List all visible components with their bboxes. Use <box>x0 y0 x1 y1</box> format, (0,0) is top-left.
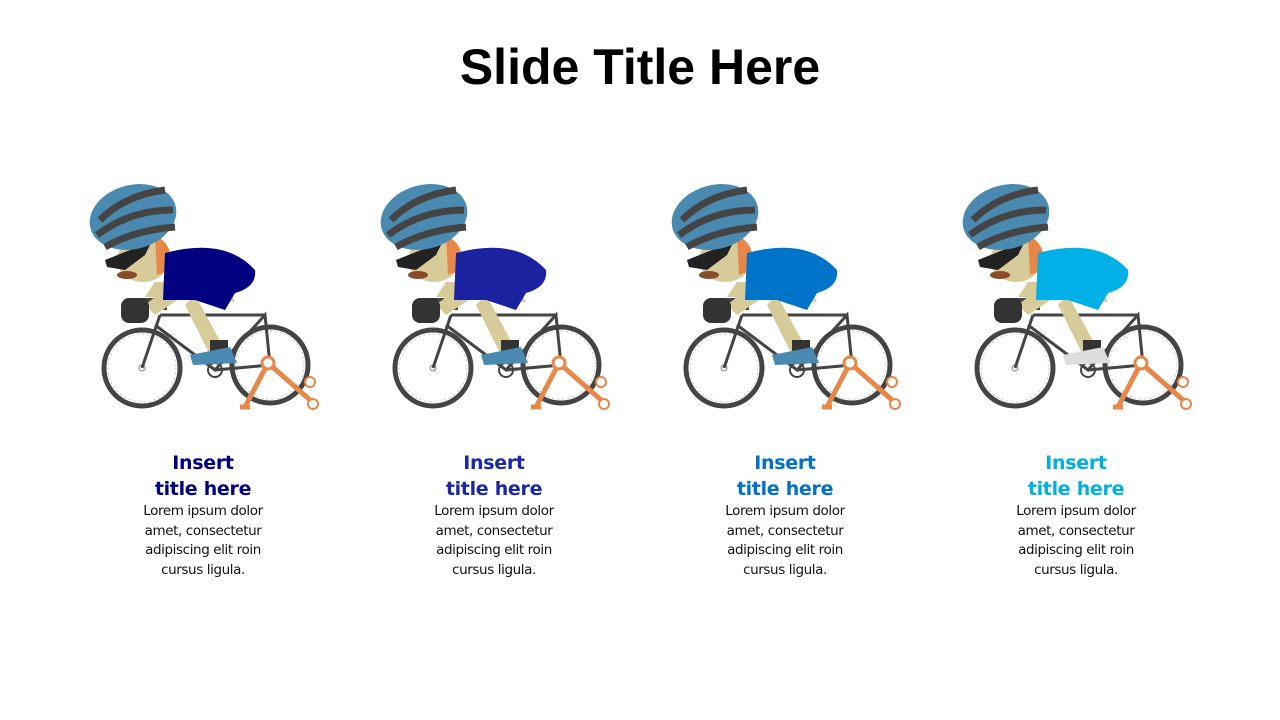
text block 1 <box>143 452 264 578</box>
cyclist 1 <box>82 175 318 409</box>
text block 2: cursus ligula. <box>452 562 536 578</box>
text block 1: Insert <box>172 452 234 474</box>
text block 3: amet, consectetur <box>727 522 843 538</box>
text block 3 <box>725 452 846 578</box>
text block 4: title here <box>1028 478 1124 500</box>
text block 1: Lorem ipsum dolor <box>143 503 263 519</box>
text block 2: adipiscing elit roin <box>436 542 552 558</box>
text block 1: amet, consectetur <box>145 522 261 538</box>
title: Slide Title Here <box>460 39 820 95</box>
text block 3: Insert <box>754 452 816 474</box>
text block 3: adipiscing elit roin <box>727 542 843 558</box>
cyclist 4 <box>955 175 1191 409</box>
text block 1: adipiscing elit roin <box>145 542 261 558</box>
text block 4: adipiscing elit roin <box>1018 542 1134 558</box>
text block 4: Lorem ipsum dolor <box>1016 503 1136 519</box>
text block 4: amet, consectetur <box>1018 522 1134 538</box>
text block 1: cursus ligula. <box>161 562 245 578</box>
text block 3: Lorem ipsum dolor <box>725 503 845 519</box>
text block 4: cursus ligula. <box>1034 562 1118 578</box>
text block 3: cursus ligula. <box>743 562 827 578</box>
text block 2: title here <box>446 478 542 500</box>
text block 4 <box>1016 452 1136 578</box>
text block 2: Insert <box>463 452 525 474</box>
text block 2: amet, consectetur <box>436 522 552 538</box>
text block 2: Lorem ipsum dolor <box>434 503 554 519</box>
cyclist 3 <box>664 175 900 409</box>
cyclist 2 <box>373 175 609 409</box>
text block 1: title here <box>155 478 251 500</box>
text block 2 <box>434 452 554 578</box>
text block 3: title here <box>737 478 833 500</box>
text block 4: Insert <box>1045 452 1107 474</box>
